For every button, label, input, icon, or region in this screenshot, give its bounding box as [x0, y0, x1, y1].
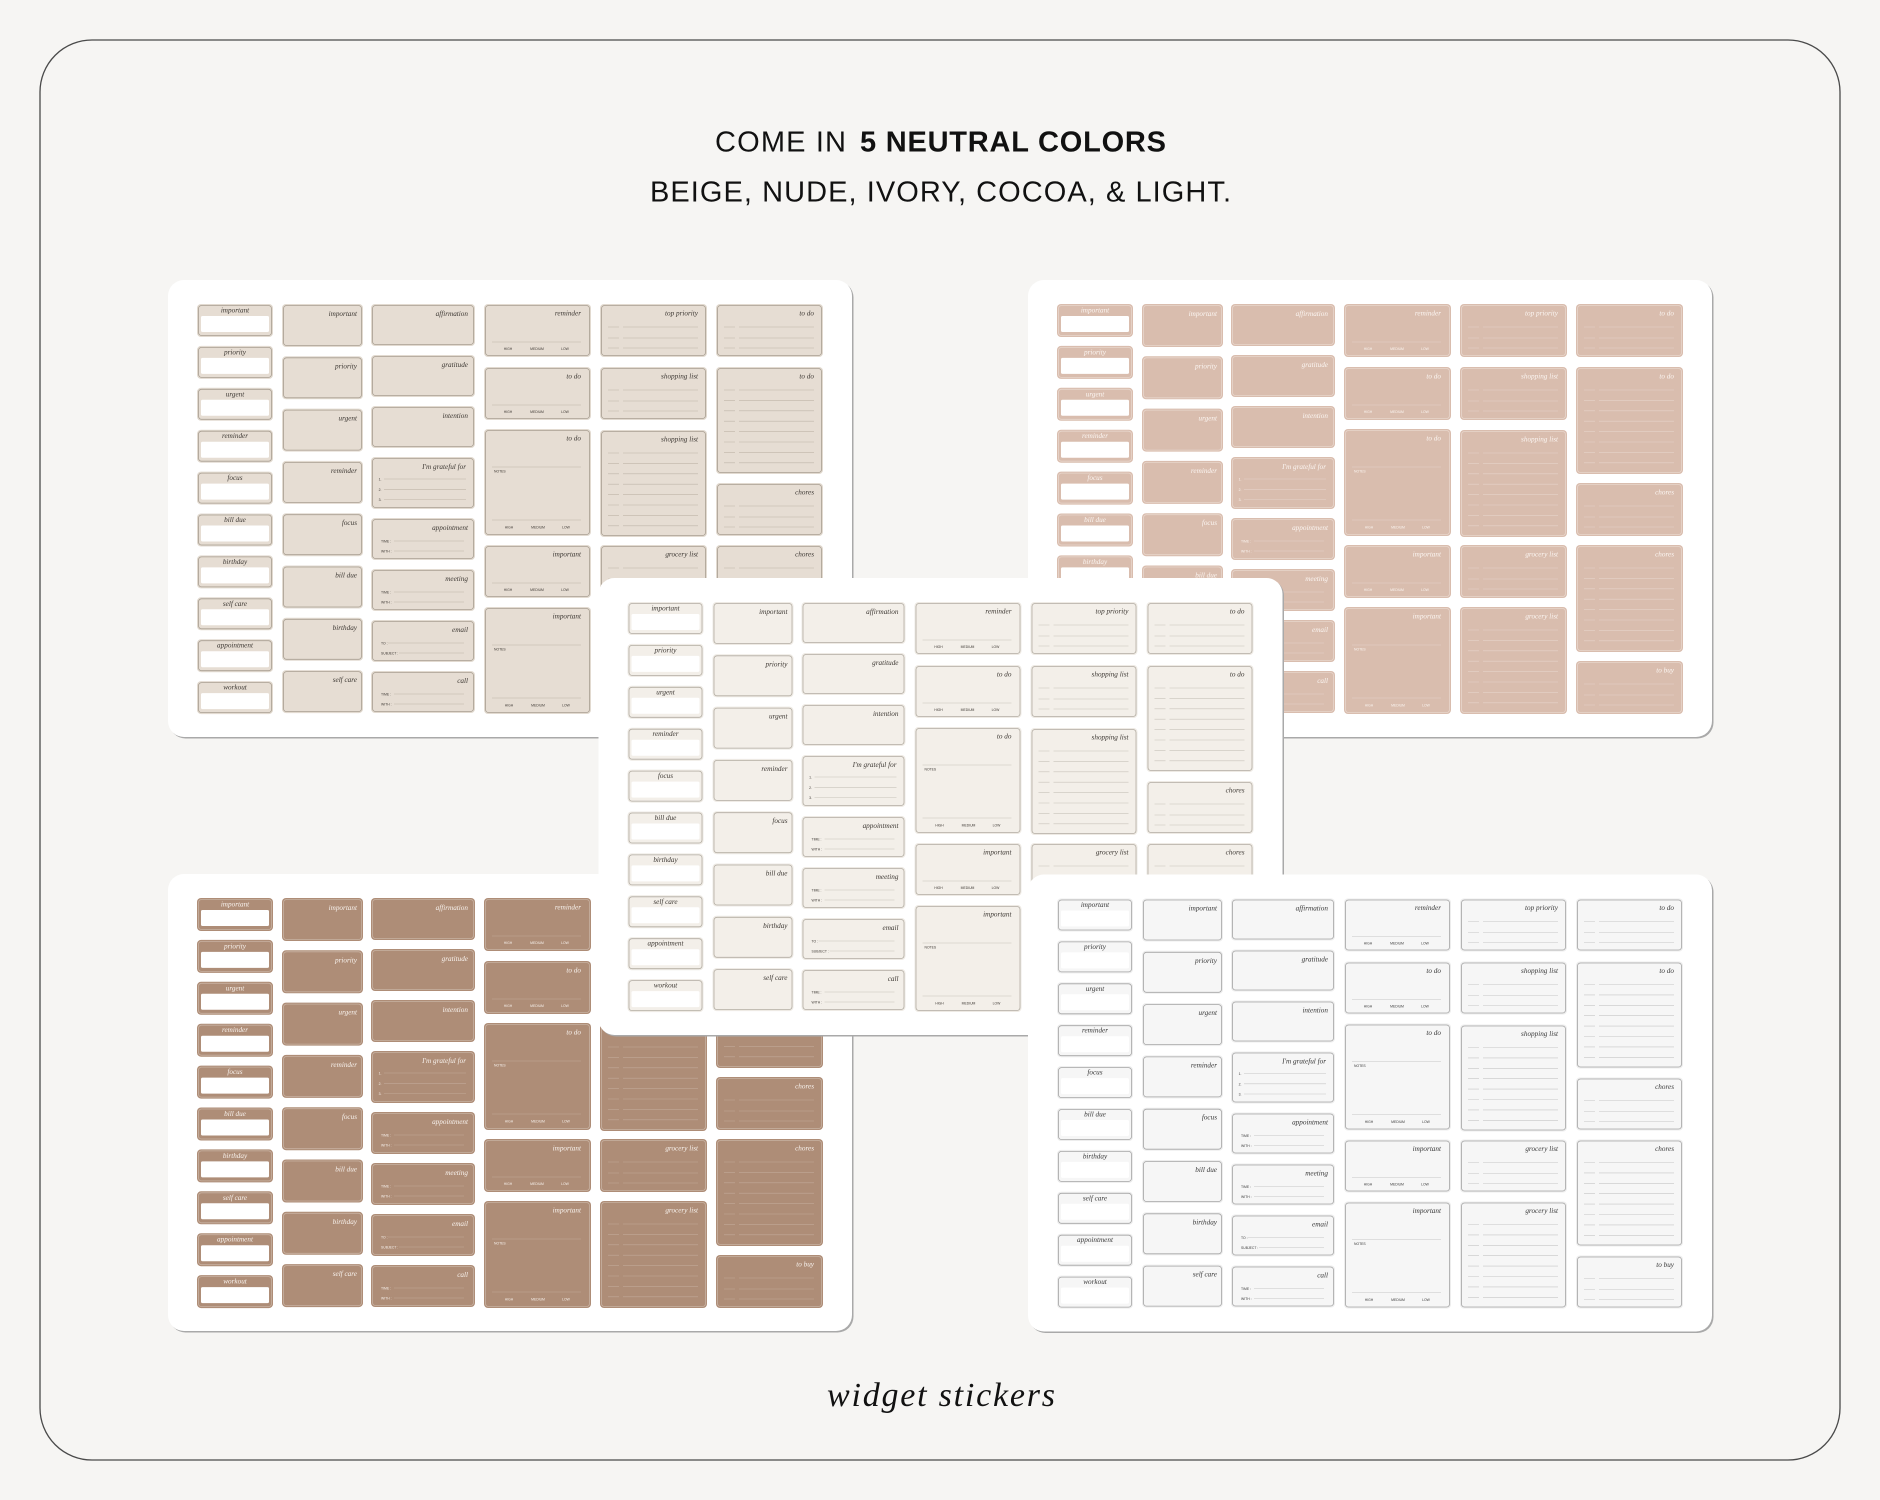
- column: label tags: bill due: [224, 1110, 247, 1118]
- column: list stickers: [600, 1024, 707, 1308]
- column: small note stickers: focus: [1202, 1114, 1217, 1122]
- column: label tags: urgent: [656, 688, 676, 696]
- column: small note stickers: urgent: [1198, 415, 1218, 423]
- panel: beige sticker sheet: [168, 280, 854, 738]
- column: label tags: bill due: [1084, 516, 1107, 524]
- column: to do and chores stickers: [1576, 304, 1683, 714]
- column: wide stickers: meeting: [445, 575, 468, 583]
- heading line 1: [715, 126, 1166, 158]
- column: small note stickers: birthday: [763, 922, 788, 930]
- column: wide stickers: [1231, 898, 1335, 1308]
- column: to do and chores stickers: to do: [1659, 310, 1674, 318]
- column: wide stickers: call: [1317, 1272, 1328, 1280]
- column: small note stickers: self care: [763, 974, 788, 982]
- heading line 1: 5 NEUTRAL COLORS: [860, 126, 1166, 158]
- column: label tags: appointment: [217, 642, 254, 650]
- column: list stickers: [1030, 602, 1138, 896]
- column: to do and chores stickers: chores: [1226, 786, 1245, 794]
- column: small note stickers: priority: [334, 362, 358, 370]
- column: priority stickers: to do: [1426, 434, 1441, 442]
- column: to do and chores stickers: to do: [1659, 372, 1674, 380]
- column: label tags: self care: [223, 600, 248, 608]
- column: wide stickers: appointment: [1292, 1118, 1329, 1126]
- column: wide stickers: gratitude: [442, 955, 469, 963]
- column: list stickers: [600, 304, 707, 598]
- column: label tags: birthday: [1083, 558, 1108, 566]
- column: label tags: birthday: [653, 856, 678, 864]
- column: wide stickers: meeting: [1305, 1170, 1328, 1178]
- column: label tags: appointment: [217, 1236, 254, 1244]
- column: priority stickers: [1344, 304, 1451, 714]
- column: to do and chores stickers: chores: [1226, 848, 1245, 856]
- column: label tags: priority: [223, 942, 247, 950]
- column: priority stickers: reminder: [1415, 904, 1441, 912]
- column: small note stickers: birthday: [1193, 1218, 1218, 1226]
- column: list stickers: top priority: [665, 310, 699, 318]
- column: to do and chores stickers: chores: [1655, 1083, 1674, 1091]
- column: label tags: priority: [1083, 348, 1107, 356]
- column: label tags: focus: [227, 474, 243, 482]
- column: wide stickers: intention: [442, 412, 468, 420]
- column: label tags: reminder: [652, 730, 679, 738]
- column: wide stickers: intention: [1302, 412, 1328, 420]
- column: wide stickers: appointment: [1292, 524, 1329, 532]
- column: small note stickers: priority: [1194, 362, 1218, 370]
- column: wide stickers: I'm grateful for: [852, 761, 897, 769]
- column: small note stickers: reminder: [1191, 467, 1217, 475]
- column: to do and chores stickers: to buy: [1656, 666, 1675, 674]
- column: small note stickers: priority: [334, 956, 358, 964]
- column: wide stickers: email: [883, 924, 899, 932]
- column: wide stickers: gratitude: [1302, 956, 1329, 964]
- column: label tags: reminder: [1082, 1027, 1108, 1035]
- column: small note stickers: bill due: [335, 1166, 358, 1174]
- column: wide stickers: meeting: [876, 873, 899, 881]
- column: priority stickers: to do: [566, 1028, 581, 1036]
- column: priority stickers: to do: [566, 966, 581, 974]
- column: label tags: bill due: [655, 814, 677, 822]
- column: list stickers: grocery list: [665, 1144, 699, 1152]
- column: small note stickers: birthday: [333, 1218, 358, 1226]
- column: small note stickers: bill due: [766, 870, 788, 878]
- column: label tags: self care: [223, 1194, 248, 1202]
- column: small note stickers: focus: [342, 1113, 357, 1121]
- column: small note stickers: important: [759, 608, 788, 616]
- column: list stickers: grocery list: [1525, 612, 1559, 620]
- column: to do and chores stickers: to buy: [1656, 1261, 1675, 1269]
- column: to do and chores stickers: [1146, 602, 1254, 950]
- column: small note stickers: [282, 898, 363, 1307]
- column: wide stickers: intention: [1302, 1006, 1328, 1014]
- column: small note stickers: [282, 304, 363, 713]
- panel: ivory sticker sheet: [598, 578, 1284, 1036]
- column: label tags: focus: [1087, 474, 1103, 482]
- column: to do and chores stickers: to do: [799, 372, 814, 380]
- column: priority stickers: to do: [1426, 372, 1441, 380]
- column: wide stickers: email: [1312, 1220, 1328, 1228]
- column: label tags: workout: [654, 982, 678, 990]
- column: small note stickers: urgent: [338, 1009, 358, 1017]
- column: label tags: workout: [223, 684, 248, 692]
- column: small note stickers: birthday: [333, 624, 358, 632]
- column: wide stickers: I'm grateful for: [1281, 463, 1326, 471]
- column: priority stickers: reminder: [555, 310, 581, 318]
- column: to do and chores stickers: to do: [1659, 904, 1674, 912]
- column: priority stickers: reminder: [1415, 310, 1441, 318]
- column: wide stickers: call: [1317, 677, 1328, 685]
- column: list stickers: shopping list: [1521, 436, 1559, 444]
- column: small note stickers: focus: [1202, 519, 1217, 527]
- column: label tags: urgent: [1086, 390, 1105, 398]
- column: list stickers: shopping list: [1521, 372, 1559, 380]
- column: small note stickers: reminder: [331, 1061, 357, 1069]
- column: to do and chores stickers: [716, 304, 823, 652]
- column: priority stickers: to do: [997, 670, 1012, 678]
- column: wide stickers: [1231, 304, 1335, 713]
- column: small note stickers: reminder: [761, 765, 788, 773]
- column: priority stickers: to do: [566, 434, 581, 442]
- column: wide stickers: affirmation: [436, 904, 468, 912]
- caption: widget stickers: widget stickers: [827, 1377, 1055, 1414]
- column: wide stickers: call: [457, 1271, 468, 1279]
- column: small note stickers: [1142, 898, 1223, 1308]
- column: to do and chores stickers: [716, 961, 823, 1308]
- column: label tags: focus: [658, 772, 673, 780]
- column: to do and chores stickers: to do: [1230, 670, 1245, 678]
- column: list stickers: grocery list: [1525, 550, 1559, 558]
- column: label tags: bill due: [224, 516, 247, 524]
- column: to do and chores stickers: chores: [1655, 1145, 1674, 1153]
- column: to do and chores stickers: [1576, 898, 1683, 1308]
- column: list stickers: top priority: [1525, 904, 1559, 912]
- column: priority stickers: reminder: [985, 608, 1012, 616]
- column: label tags: appointment: [1077, 1236, 1114, 1244]
- column: priority stickers: to do: [566, 372, 581, 380]
- column: label tags: priority: [1083, 943, 1107, 951]
- column: wide stickers: gratitude: [872, 659, 899, 667]
- column: small note stickers: urgent: [1198, 1009, 1218, 1017]
- column: list stickers: top priority: [1525, 310, 1559, 318]
- column: label tags: reminder: [1082, 432, 1108, 440]
- column: label tags: [197, 898, 273, 1308]
- column: label tags: important: [1081, 306, 1110, 314]
- column: small note stickers: focus: [342, 519, 357, 527]
- column: wide stickers: gratitude: [1302, 361, 1329, 369]
- column: wide stickers: call: [457, 677, 468, 685]
- column: label tags: focus: [1087, 1069, 1103, 1077]
- column: label tags: [197, 304, 273, 714]
- column: label tags: workout: [1083, 1278, 1108, 1286]
- column: wide stickers: [371, 898, 475, 1307]
- column: wide stickers: appointment: [863, 822, 899, 830]
- column: list stickers: shopping list: [661, 436, 699, 444]
- column: wide stickers: [371, 304, 475, 713]
- column: list stickers: [1460, 304, 1567, 714]
- column: priority stickers: important: [1413, 612, 1442, 620]
- column: small note stickers: focus: [772, 817, 788, 825]
- column: label tags: birthday: [223, 1152, 248, 1160]
- column: small note stickers: self care: [333, 1270, 358, 1278]
- column: list stickers: shopping list: [1521, 967, 1559, 975]
- column: wide stickers: email: [452, 1220, 468, 1228]
- column: small note stickers: reminder: [331, 467, 357, 475]
- column: wide stickers: meeting: [445, 1169, 468, 1177]
- column: to do and chores stickers: chores: [1655, 488, 1674, 496]
- column: list stickers: shopping list: [661, 372, 699, 380]
- column: label tags: important: [1081, 901, 1110, 909]
- column: to do and chores stickers: chores: [795, 1082, 814, 1090]
- panel: nude sticker sheet: [1028, 280, 1714, 738]
- column: wide stickers: affirmation: [1296, 904, 1328, 912]
- column: list stickers: grocery list: [1525, 1207, 1559, 1215]
- title: [650, 126, 1231, 208]
- column: priority stickers: important: [553, 1206, 582, 1214]
- column: small note stickers: self care: [1193, 1271, 1218, 1279]
- column: small note stickers: priority: [765, 660, 788, 668]
- column: priority stickers: important: [1413, 1207, 1442, 1215]
- column: priority stickers: important: [553, 612, 582, 620]
- column: wide stickers: email: [1312, 626, 1328, 634]
- column: wide stickers: intention: [442, 1006, 468, 1014]
- column: wide stickers: appointment: [432, 1118, 469, 1126]
- column: priority stickers: to do: [1426, 967, 1441, 975]
- column: label tags: reminder: [222, 432, 248, 440]
- column: small note stickers: bill due: [1195, 572, 1218, 580]
- column: wide stickers: intention: [873, 710, 899, 718]
- column: label tags: important: [221, 900, 250, 908]
- column: wide stickers: I'm grateful for: [421, 1057, 466, 1065]
- column: wide stickers: appointment: [432, 524, 469, 532]
- column: label tags: urgent: [226, 390, 245, 398]
- column: priority stickers: [484, 304, 591, 714]
- column: small note stickers: [1142, 304, 1223, 608]
- column: small note stickers: urgent: [769, 713, 789, 721]
- column: small note stickers: important: [1189, 904, 1218, 912]
- column: priority stickers: [484, 898, 591, 1308]
- column: small note stickers: [712, 602, 794, 1011]
- column: priority stickers: important: [553, 1144, 582, 1152]
- column: wide stickers: affirmation: [1296, 310, 1328, 318]
- column: priority stickers: to do: [1426, 1029, 1441, 1037]
- column: list stickers: grocery list: [665, 550, 699, 558]
- column: to do and chores stickers: chores: [795, 1144, 814, 1152]
- column: wide stickers: I'm grateful for: [421, 463, 466, 471]
- column: label tags: important: [651, 604, 681, 612]
- column: wide stickers: affirmation: [866, 608, 899, 616]
- column: to do and chores stickers: chores: [1655, 550, 1674, 558]
- column: label tags: reminder: [222, 1026, 248, 1034]
- column: priority stickers: important: [1413, 1145, 1442, 1153]
- column: small note stickers: important: [329, 904, 358, 912]
- column: wide stickers: affirmation: [436, 310, 468, 318]
- column: label tags: self care: [653, 898, 678, 906]
- column: label tags: self care: [1083, 1194, 1108, 1202]
- column: list stickers: shopping list: [1092, 734, 1129, 742]
- column: priority stickers: to do: [997, 732, 1012, 740]
- panel: cocoa sticker sheet: [168, 874, 854, 1332]
- column: label tags: priority: [223, 348, 247, 356]
- column: wide stickers: meeting: [1305, 575, 1328, 583]
- column: priority stickers: [1344, 898, 1451, 1308]
- column: wide stickers: call: [888, 975, 898, 983]
- column: list stickers: top priority: [1096, 608, 1129, 616]
- column: list stickers: grocery list: [665, 1206, 699, 1214]
- column: to do and chores stickers: to do: [1230, 608, 1245, 616]
- column: label tags: bill due: [1084, 1110, 1107, 1118]
- column: label tags: urgent: [226, 984, 245, 992]
- column: small note stickers: important: [329, 310, 358, 318]
- heading line 1: COME IN: [715, 126, 846, 158]
- column: small note stickers: priority: [1194, 957, 1218, 965]
- column: wide stickers: gratitude: [442, 361, 469, 369]
- column: priority stickers: important: [553, 550, 582, 558]
- column: list stickers: grocery list: [1525, 1145, 1559, 1153]
- column: to do and chores stickers: to buy: [796, 1260, 815, 1268]
- column: to do and chores stickers: chores: [795, 488, 814, 496]
- column: label tags: urgent: [1086, 985, 1105, 993]
- heading line 2: BEIGE, NUDE, IVORY, COCOA, & LIGHT.: [650, 176, 1231, 208]
- column: label tags: priority: [654, 646, 677, 654]
- column: label tags: birthday: [223, 558, 248, 566]
- column: list stickers: grocery list: [1096, 848, 1130, 856]
- column: label tags: focus: [227, 1068, 243, 1076]
- column: label tags: birthday: [1083, 1152, 1108, 1160]
- column: list stickers: shopping list: [1092, 670, 1129, 678]
- column: label tags: [628, 602, 704, 1012]
- column: list stickers: [1460, 898, 1567, 1308]
- column: small note stickers: important: [1189, 310, 1218, 318]
- column: label tags: [1057, 898, 1133, 1309]
- column: label tags: appointment: [648, 940, 684, 948]
- column: small note stickers: bill due: [1195, 1166, 1218, 1174]
- column: list stickers: shopping list: [1521, 1030, 1559, 1038]
- column: to do and chores stickers: to do: [799, 310, 814, 318]
- column: small note stickers: reminder: [1191, 1061, 1217, 1069]
- column: priority stickers: reminder: [555, 904, 581, 912]
- column: label tags: important: [221, 306, 250, 314]
- column: small note stickers: bill due: [335, 572, 358, 580]
- column: label tags: workout: [223, 1278, 248, 1286]
- column: priority stickers: important: [983, 848, 1012, 856]
- column: priority stickers: [914, 602, 1022, 1012]
- panel: light sticker sheet: [1028, 874, 1714, 1333]
- column: priority stickers: important: [983, 910, 1012, 918]
- column: wide stickers: I'm grateful for: [1281, 1058, 1326, 1066]
- column: to do and chores stickers: chores: [795, 550, 814, 558]
- column: to do and chores stickers: to do: [1659, 967, 1674, 975]
- column: label tags: [1057, 304, 1133, 588]
- column: wide stickers: email: [452, 626, 468, 634]
- column: small note stickers: self care: [333, 676, 358, 684]
- column: priority stickers: important: [1413, 550, 1442, 558]
- column: small note stickers: urgent: [338, 415, 358, 423]
- column: wide stickers: [802, 602, 906, 1011]
